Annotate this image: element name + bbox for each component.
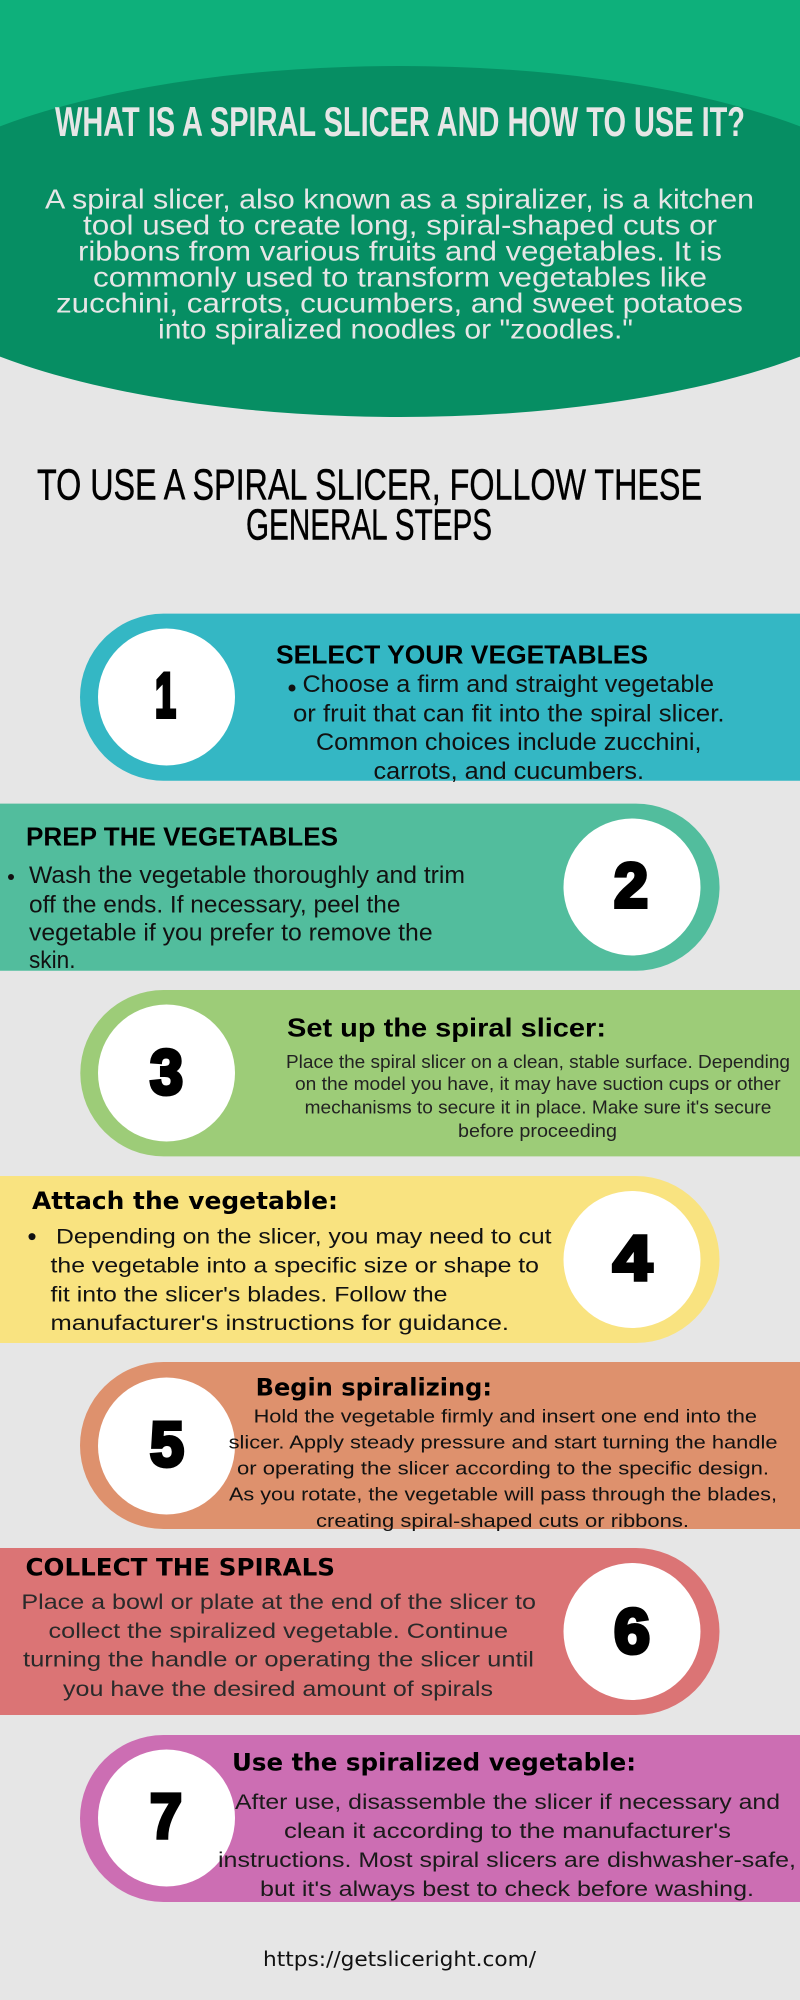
step 4 body: manufacturer's instructions for guidance. bbox=[50, 1312, 509, 1335]
step 4 number badge: 4 bbox=[613, 1224, 652, 1294]
step 2 number badge: 2 bbox=[614, 851, 648, 921]
step 4 body bbox=[28, 1226, 552, 1335]
step 5 panel bbox=[80, 1362, 800, 1531]
intro paragraph bbox=[45, 184, 754, 345]
step 5 body bbox=[229, 1406, 778, 1531]
step 3 body: on the model you have, it may have suction cups or other bbox=[295, 1074, 781, 1094]
step 5 number badge: 5 bbox=[150, 1410, 184, 1480]
step 6 number badge bbox=[564, 1563, 700, 1700]
header light green band bbox=[0, 0, 800, 241]
step 2 body bbox=[8, 862, 465, 974]
step 3 pill bbox=[80, 990, 800, 1156]
step 2 body: vegetable if you prefer to remove the bbox=[29, 919, 433, 946]
step 6 body bbox=[21, 1591, 536, 1701]
step 4 body: fit into the slicer's blades. Follow the bbox=[50, 1283, 448, 1306]
intro paragraph: commonly used to transform vegetables like bbox=[93, 262, 707, 293]
footer url: https://getsliceright.com/ bbox=[263, 1947, 536, 1971]
step 5 body: As you rotate, the vegetable will pass through the blades, bbox=[229, 1485, 777, 1505]
step 2 number badge bbox=[564, 818, 700, 956]
step 2 panel bbox=[0, 804, 720, 974]
step 3 body: mechanisms to secure it in place. Make sure it's secure bbox=[305, 1098, 771, 1118]
step 4 panel bbox=[0, 1176, 720, 1343]
intro paragraph: zucchini, carrots, cucumbers, and sweet potatoes bbox=[56, 288, 743, 319]
step 1 heading: SELECT YOUR VEGETABLES bbox=[276, 640, 648, 670]
step 2 body: skin. bbox=[29, 947, 76, 974]
step 1 body: Common choices include zucchini, bbox=[316, 729, 702, 756]
step 3 body: Place the spiral slicer on a clean, stable surface. Depending bbox=[286, 1052, 790, 1072]
intro paragraph: into spiralized noodles or "zoodles." bbox=[158, 314, 633, 345]
step 3 number badge: 3 bbox=[150, 1038, 183, 1108]
step 2 body: off the ends. If necessary, peel the bbox=[29, 892, 400, 918]
step 5 body: slicer. Apply steady pressure and start turning the handle bbox=[229, 1433, 778, 1453]
header panel bbox=[0, 0, 800, 417]
step 6 body: you have the desired amount of spirals bbox=[63, 1678, 493, 1701]
step 6 pill bbox=[0, 1548, 720, 1715]
step 3 panel bbox=[80, 990, 800, 1156]
step 2 heading: PREP THE VEGETABLES bbox=[26, 822, 338, 852]
step 7 panel bbox=[80, 1735, 800, 1902]
step 5 body: or operating the slicer according to the specific design. bbox=[237, 1458, 769, 1478]
step 1 panel bbox=[80, 614, 800, 785]
step 7 number badge: 7 bbox=[150, 1782, 182, 1852]
step 1 number badge bbox=[98, 628, 235, 766]
step 7 body: instructions. Most spiral slicers are dishwasher-safe, bbox=[218, 1849, 796, 1872]
step 7 body: clean it according to the manufacturer's bbox=[284, 1820, 731, 1843]
step 5 body: creating spiral-shaped cuts or ribbons. bbox=[316, 1511, 689, 1531]
intro paragraph: tool used to create long, spiral-shaped cuts or bbox=[83, 210, 717, 241]
step 6 number badge: 6 bbox=[614, 1597, 650, 1667]
step 4 pill bbox=[0, 1176, 720, 1343]
header dark green ellipse bbox=[0, 66, 800, 417]
step 7 body: but it's always best to check before washing. bbox=[260, 1878, 754, 1901]
step 5 heading: Begin spiralizing: bbox=[256, 1374, 492, 1402]
step 1 body: carrots, and cucumbers. bbox=[374, 758, 644, 785]
intro paragraph: A spiral slicer, also known as a spiralizer, is a kitchen bbox=[45, 184, 754, 215]
step 7 pill bbox=[80, 1735, 800, 1902]
step 3 heading: Set up the spiral slicer: bbox=[287, 1012, 606, 1042]
step 6 body: turning the handle or operating the slicer until bbox=[23, 1649, 534, 1672]
step 3 body: before proceeding bbox=[458, 1121, 617, 1141]
step 7 body bbox=[218, 1791, 796, 1901]
step 5 number badge bbox=[98, 1378, 235, 1514]
step 4 number badge bbox=[564, 1191, 700, 1328]
step 7 number badge bbox=[98, 1750, 235, 1886]
section heading: GENERAL STEPS bbox=[246, 501, 492, 550]
step 6 body: Place a bowl or plate at the end of the slicer to bbox=[21, 1591, 536, 1614]
step 4 body: Depending on the slicer, you may need to cut bbox=[56, 1226, 552, 1249]
step 1 body: Choose a firm and straight vegetable bbox=[302, 671, 714, 698]
section heading bbox=[37, 460, 702, 550]
step 4 body: the vegetable into a specific size or shape to bbox=[50, 1254, 539, 1278]
step 7 body: After use, disassemble the slicer if necessary and bbox=[235, 1791, 780, 1814]
step 3 body bbox=[286, 1052, 790, 1141]
step 6 panel bbox=[0, 1548, 720, 1715]
intro paragraph: ribbons from various fruits and vegetables. It is bbox=[78, 236, 722, 267]
step 2 pill bbox=[0, 804, 720, 971]
step 1 body: or fruit that can fit into the spiral slicer. bbox=[293, 700, 724, 727]
step 1 number badge: 1 bbox=[155, 661, 176, 731]
step 4 heading: Attach the vegetable: bbox=[32, 1187, 338, 1215]
step 1 body bbox=[288, 671, 724, 785]
step 6 body: collect the spiralized vegetable. Continue bbox=[48, 1620, 508, 1643]
step 1 pill bbox=[80, 614, 800, 781]
step 2 body: Wash the vegetable thoroughly and trim bbox=[29, 862, 465, 889]
step 6 heading: COLLECT THE SPIRALS bbox=[26, 1554, 335, 1582]
step 7 heading: Use the spiralized vegetable: bbox=[232, 1749, 636, 1777]
step 5 body: Hold the vegetable firmly and insert one end into the bbox=[254, 1406, 757, 1426]
step 3 number badge bbox=[98, 1004, 235, 1142]
step 5 pill bbox=[80, 1362, 800, 1529]
